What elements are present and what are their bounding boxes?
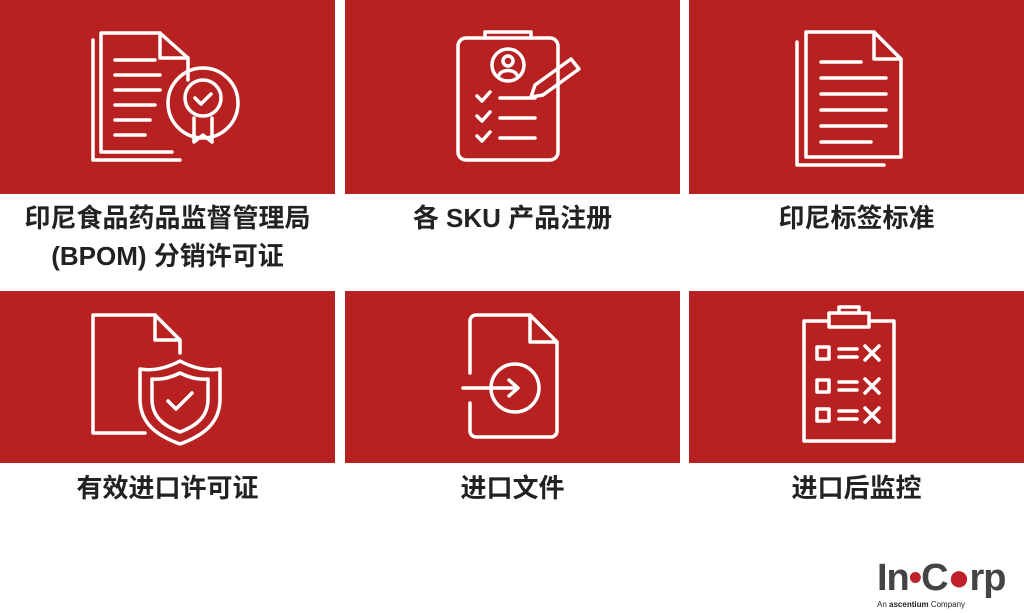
logo: InCorp: An ascentium Company — [877, 600, 965, 609]
icon: documents with badge — [91, 31, 240, 162]
text: post-import monitoring: 进口后监控 — [791, 473, 922, 503]
icon: stacked documents — [795, 30, 903, 167]
icon: checklist clipboard — [802, 305, 896, 443]
text: valid import license: 有效进口许可证 — [76, 473, 258, 503]
icon: file with arrow — [461, 313, 559, 439]
panel: post-import monitoring — [689, 291, 1024, 463]
text: import documents: 进口文件 — [460, 473, 564, 503]
logo: InCorp: In•C●rp — [877, 557, 1006, 599]
text: Indonesian labeling standard: 印尼标签标准 — [778, 203, 934, 233]
icon: clipboard with person and pencil — [456, 30, 581, 162]
panel: BPOM distribution license — [0, 0, 335, 194]
panel: SKU registration — [345, 0, 680, 194]
text: SKU registration: 各 SKU 产品注册 — [413, 203, 612, 233]
text: BPOM distribution license: 印尼食品药品监督管理局 — [24, 203, 310, 233]
text: BPOM distribution license: (BPOM) 分销许可证 — [51, 241, 284, 271]
panel: valid import license — [0, 291, 335, 463]
icon: document with shield — [91, 313, 222, 446]
text: BPOM distribution license — [24, 203, 310, 271]
panel: labeling standard — [689, 0, 1024, 194]
panel: import documents — [345, 291, 680, 463]
